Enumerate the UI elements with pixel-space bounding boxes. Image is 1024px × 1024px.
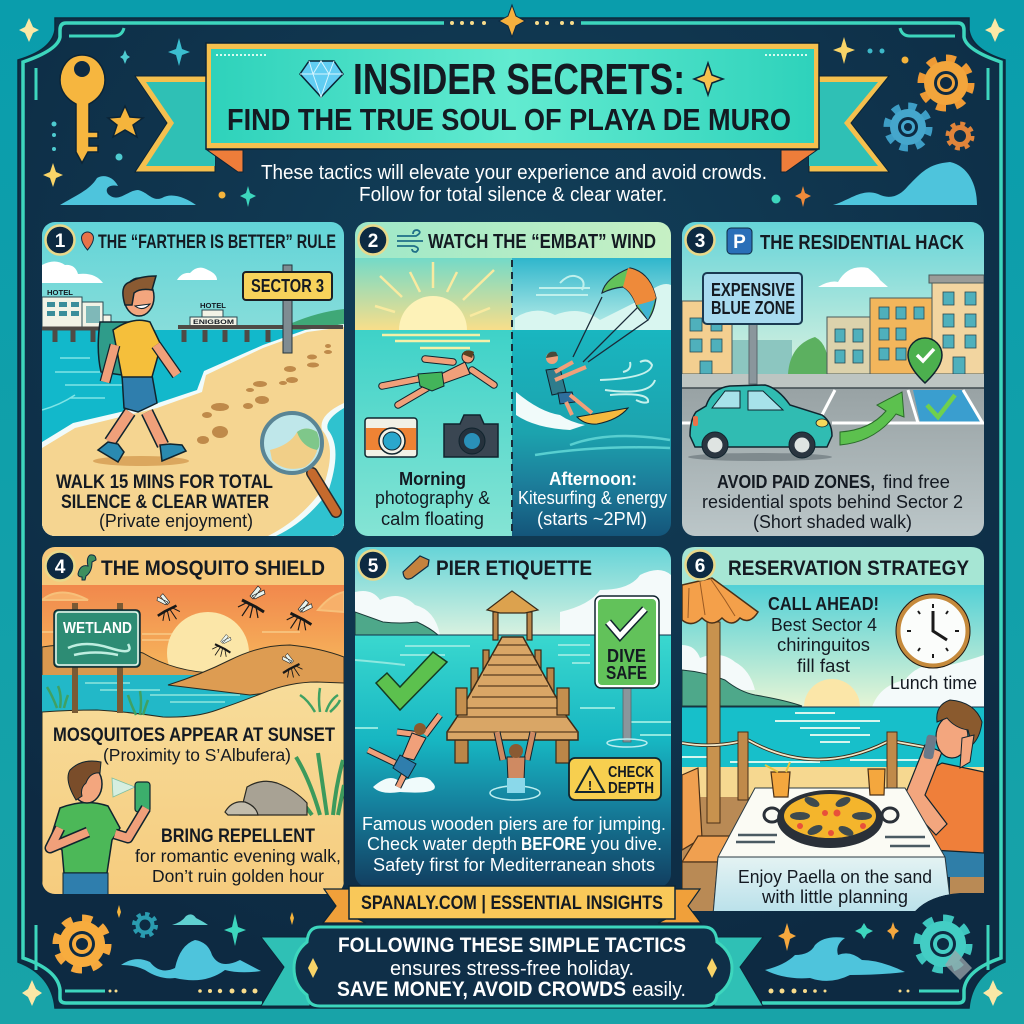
source ribbon: SPANALY.COM | ESSENTIAL INSIGHTS bbox=[361, 893, 663, 914]
icon: wave left bbox=[121, 940, 261, 980]
title line 1: INSIDER SECRETS: bbox=[353, 55, 685, 104]
clouds bbox=[515, 284, 671, 330]
hotels: ENIGBOM bbox=[193, 320, 234, 326]
text: morning: calm floating bbox=[381, 509, 484, 529]
text: afternoon bbox=[518, 469, 667, 529]
chair bbox=[682, 768, 735, 912]
panel 5 heading: PIER ETIQUETTE bbox=[436, 557, 592, 580]
clock bbox=[896, 594, 970, 668]
text: morning: Morning bbox=[399, 469, 466, 489]
clouds bbox=[355, 570, 671, 635]
footprints bbox=[197, 344, 332, 444]
icon: diamond bbox=[300, 61, 343, 97]
paella bbox=[764, 790, 898, 848]
icon: wave right bbox=[765, 937, 905, 981]
text: morning bbox=[375, 469, 490, 529]
floating person bbox=[382, 350, 494, 405]
callout: check depth: CHECK bbox=[608, 764, 654, 781]
subtitle: Follow for total silence & clear water. bbox=[359, 184, 667, 206]
subtitle bbox=[261, 162, 767, 206]
caption: repellent: Don’t ruin golden hour bbox=[152, 866, 324, 886]
caption: repellent bbox=[135, 826, 341, 886]
caption: call ahead: Best Sector 4 bbox=[771, 615, 877, 635]
caption bbox=[702, 472, 963, 532]
callout: check depth bbox=[569, 758, 661, 800]
label: lunch time: Lunch time bbox=[890, 673, 977, 693]
sign: dive safe bbox=[595, 596, 659, 747]
panel 4: mosquito shield bbox=[42, 547, 344, 896]
sign: dive safe: DIVE bbox=[607, 646, 646, 666]
caption: paella: Enjoy Paella on the sand bbox=[738, 867, 932, 887]
caption: SILENCE & CLEAR WATER bbox=[61, 491, 269, 513]
cloud bbox=[818, 267, 888, 287]
dashed divider bbox=[511, 260, 513, 536]
sea bbox=[682, 707, 984, 769]
grass bbox=[47, 686, 344, 815]
panel 6: reservation strategy bbox=[682, 547, 984, 915]
sparkles left bbox=[117, 905, 294, 946]
panel 5 heading bbox=[358, 550, 592, 580]
caption: Safety first for Mediterranean shots bbox=[373, 854, 655, 875]
deck bbox=[682, 797, 760, 915]
ribbon tails bbox=[135, 76, 889, 172]
caption: paella bbox=[738, 867, 932, 907]
jumper bbox=[368, 715, 440, 793]
caption: repellent: BRING REPELLENT bbox=[161, 826, 315, 847]
man on phone bbox=[903, 700, 984, 897]
rock bbox=[225, 781, 307, 815]
person walking bbox=[93, 276, 189, 466]
hill bbox=[682, 670, 802, 706]
icon: dark camera bbox=[444, 415, 498, 457]
cutlery bbox=[736, 835, 930, 846]
person spraying bbox=[50, 761, 150, 895]
clouds bbox=[682, 645, 984, 707]
text: afternoon: (starts ~2PM) bbox=[537, 509, 647, 529]
caption: mosquitoes bbox=[53, 725, 335, 765]
bottom banner: easily. bbox=[632, 979, 686, 1001]
caption: residential spots behind Sector 2 bbox=[702, 492, 963, 512]
icon: gear small bbox=[134, 914, 156, 936]
icon: right wave bbox=[833, 162, 977, 205]
panel 5 heading: 5 bbox=[368, 556, 379, 577]
caption bbox=[56, 471, 273, 531]
icon: golden key bbox=[60, 55, 105, 163]
clouds bbox=[42, 592, 344, 640]
mosquitoes bbox=[157, 586, 312, 678]
sign: sector 3 bbox=[243, 265, 332, 353]
sign: dive safe: SAFE bbox=[606, 663, 647, 683]
hills and water bbox=[42, 645, 344, 720]
caption bbox=[362, 813, 666, 875]
sign: sector 3: SECTOR 3 bbox=[251, 276, 324, 296]
caption: Check water depth bbox=[367, 833, 517, 854]
sea bbox=[355, 635, 671, 887]
hotels: HOTEL bbox=[47, 288, 73, 297]
panel 6 heading: RESERVATION STRATEGY bbox=[728, 557, 969, 580]
big check mark bbox=[376, 652, 447, 710]
icon: gold star bbox=[108, 106, 143, 137]
car bbox=[688, 385, 832, 461]
sun bbox=[375, 262, 494, 348]
panel 1 heading: 1 bbox=[55, 231, 66, 252]
hill and sea bbox=[42, 309, 344, 442]
panel 2: embat wind bbox=[355, 222, 671, 536]
icon: gears bbox=[887, 58, 972, 148]
icon: cloud bbox=[172, 914, 208, 925]
sign: blue zone: EXPENSIVE bbox=[711, 280, 795, 300]
panel 6 heading bbox=[686, 550, 969, 580]
panel 6 heading: 6 bbox=[695, 556, 705, 577]
panel 3 heading: 3 bbox=[695, 231, 705, 252]
sparkles right bbox=[778, 922, 899, 951]
bottom decorations bbox=[56, 905, 972, 994]
title line 2: FIND THE TRUE SOUL OF PLAYA DE MURO bbox=[227, 102, 791, 137]
clouds bbox=[42, 262, 217, 283]
dots left bbox=[108, 988, 258, 994]
drinks bbox=[765, 762, 885, 797]
magnifying glass bbox=[262, 413, 336, 512]
caption: repellent: for romantic evening walk, bbox=[135, 846, 341, 866]
icon: left wave bbox=[60, 176, 196, 205]
table with cloth bbox=[713, 788, 952, 915]
panel 2 heading bbox=[358, 226, 656, 254]
caption: WALK 15 MINS FOR TOTAL bbox=[56, 471, 273, 493]
bottom banner: FOLLOWING THESE SIMPLE TACTICS bbox=[338, 934, 686, 957]
buildings bbox=[682, 275, 984, 374]
caption: call ahead bbox=[768, 594, 879, 676]
caption: call ahead: chiringuitos bbox=[777, 635, 870, 655]
caption: you dive. bbox=[591, 833, 662, 854]
panel 4 heading: THE MOSQUITO SHIELD bbox=[101, 557, 325, 580]
panel 4 heading: 4 bbox=[55, 557, 66, 578]
road bbox=[682, 374, 984, 538]
decorative sparkles left bbox=[43, 38, 256, 207]
panel 3 heading: P bbox=[733, 232, 746, 253]
sign: blue zone: BLUE ZONE bbox=[711, 298, 795, 318]
callout: check depth: ! bbox=[588, 778, 592, 793]
sign: blue zone bbox=[703, 273, 802, 384]
text: afternoon: Afternoon: bbox=[549, 469, 637, 489]
sign: wetland bbox=[54, 603, 140, 713]
decorative sparkles right bbox=[772, 37, 908, 207]
icon: gear right bbox=[917, 918, 972, 980]
icon: gear left bbox=[56, 918, 108, 970]
sun bbox=[804, 679, 860, 707]
icon: orange camera bbox=[365, 418, 417, 457]
kitesurfer bbox=[516, 268, 670, 455]
sand bbox=[682, 767, 984, 801]
source ribbon bbox=[323, 886, 701, 923]
caption: AVOID PAID ZONES, bbox=[717, 472, 875, 492]
rope fence bbox=[682, 732, 930, 800]
panel 4 heading bbox=[46, 552, 325, 580]
caption: call ahead: CALL AHEAD! bbox=[768, 594, 879, 614]
callout: check depth: DEPTH bbox=[608, 780, 654, 797]
beach bbox=[42, 324, 344, 536]
caption: mosquitoes: (Proximity to S’Albufera) bbox=[103, 745, 291, 765]
top centre ornament bbox=[450, 5, 574, 37]
swimmer bbox=[490, 732, 540, 800]
caption: paella: with little planning bbox=[761, 887, 908, 907]
sign: wetland: WETLAND bbox=[63, 620, 132, 637]
caption: BEFORE bbox=[521, 833, 586, 854]
bottom banner: SAVE MONEY, AVOID CROWDS bbox=[337, 978, 626, 1001]
caption: Famous wooden piers are for jumping. bbox=[362, 813, 666, 834]
text: afternoon: Kitesurfing & energy bbox=[518, 488, 667, 508]
caption: (Short shaded walk) bbox=[753, 512, 912, 532]
panel 3: residential hack bbox=[682, 222, 984, 538]
hotels bbox=[42, 288, 237, 327]
panel 3 heading bbox=[686, 226, 964, 254]
title banner bbox=[206, 43, 819, 149]
caption: call ahead: fill fast bbox=[797, 656, 850, 676]
dots right bbox=[768, 988, 910, 994]
panel 1: farther is better bbox=[42, 222, 344, 536]
umbrella bbox=[682, 578, 758, 823]
icon: sparkle bbox=[694, 63, 723, 95]
pier bbox=[447, 591, 578, 763]
green arrow bbox=[840, 392, 904, 445]
panel 3 heading: THE RESIDENTIAL HACK bbox=[760, 232, 964, 254]
panel 1 heading bbox=[46, 226, 336, 254]
sand bbox=[42, 682, 344, 896]
panel 1 heading: THE “FARTHER IS BETTER” RULE bbox=[98, 231, 336, 253]
caption: mosquitoes: MOSQUITOES APPEAR AT SUNSET bbox=[53, 725, 335, 746]
sun bbox=[167, 612, 249, 672]
hill bbox=[355, 612, 438, 635]
piers bbox=[42, 327, 343, 342]
panel 5: pier etiquette bbox=[355, 547, 671, 887]
text: morning: photography & bbox=[375, 488, 490, 508]
hotels: HOTEL bbox=[200, 301, 226, 310]
subtitle: These tactics will elevate your experience and avoid crowds. bbox=[261, 162, 767, 184]
map pin check bbox=[908, 338, 942, 383]
bottom banner: ensures stress-free holiday. bbox=[390, 958, 634, 980]
panel 2 heading: WATCH THE “EMBAT” WIND bbox=[428, 231, 656, 253]
caption: (Private enjoyment) bbox=[99, 511, 253, 531]
parking check bbox=[927, 395, 955, 417]
panel 2 heading: 2 bbox=[368, 231, 378, 252]
caption: find free bbox=[883, 472, 950, 492]
bottom banner bbox=[261, 927, 763, 1006]
